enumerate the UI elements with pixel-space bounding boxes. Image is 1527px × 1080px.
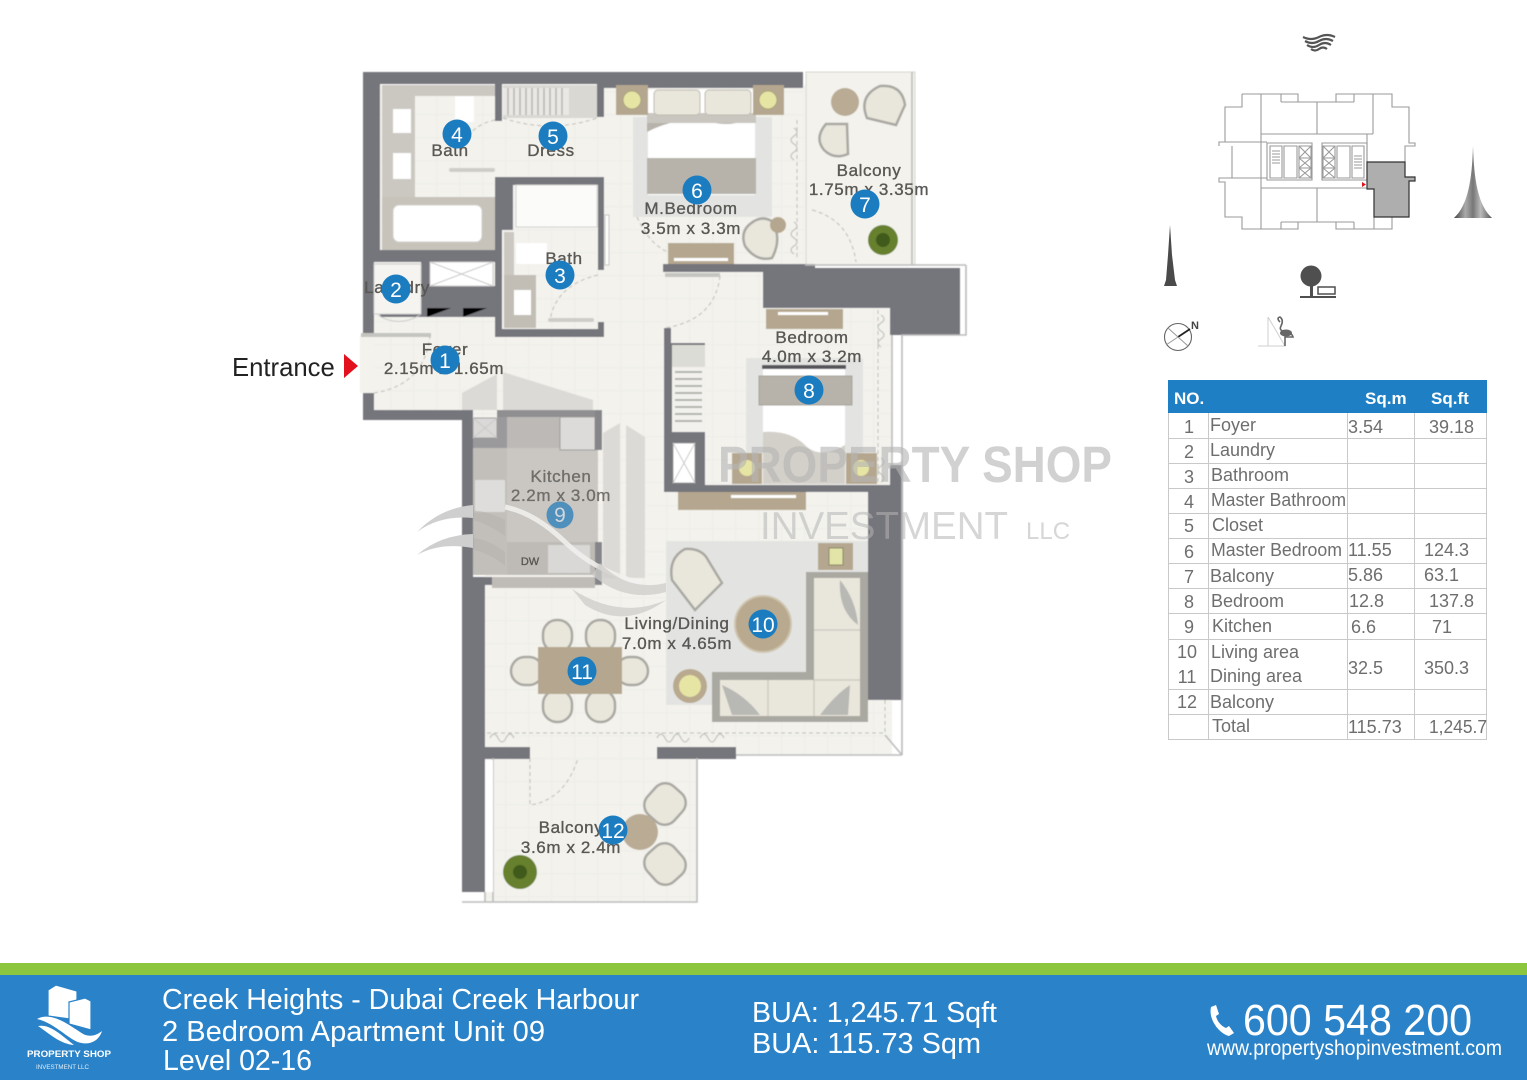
square metre values: 115.73 [1348,717,1402,737]
marker 7 [850,190,880,218]
marker 6: 6 [691,180,703,203]
marker 11 [568,656,596,686]
label: laundry: Laundry [364,278,430,297]
square foot values: 39.18 [1429,417,1474,437]
square foot values: 1,245.7 [1429,717,1487,737]
row numbers: 10 [1177,642,1197,662]
square metre values [1348,417,1402,737]
panel: dining set [511,620,648,722]
row numbers: 1 [1184,417,1194,437]
label: foyer size: 2.15m x 1.65m [384,359,504,378]
row names: Kitchen [1212,616,1272,636]
green stripe [0,963,1527,975]
square foot values: 137.8 [1429,591,1474,611]
table header: Sq.ft [1431,389,1469,408]
row numbers: 6 [1184,542,1194,562]
area table [1168,380,1487,740]
label: kitchen: Kitchen [531,467,591,486]
table header: Sq.m [1365,389,1407,408]
row numbers: 2 [1184,442,1194,462]
marker 10 [748,610,778,638]
row names: Total [1212,716,1250,736]
label: kitchen size: 2.2m x 3.0m [511,486,611,505]
row numbers: 9 [1184,617,1194,637]
row numbers: 5 [1184,516,1194,536]
BUA square metres: BUA: 115.73 Sqm [752,1028,981,1060]
marker 12 [598,816,628,844]
marker 2 [382,274,410,304]
phone number: 600 548 200 [1243,996,1472,1045]
logo waves [37,1017,102,1045]
marker 4: 4 [451,124,463,147]
watermark: Property Shop: INVESTMENT [760,505,1008,548]
marker 12: 12 [601,820,625,843]
label: dishwasher: DW [521,556,540,568]
row names: Bedroom [1211,591,1284,611]
panel: master bedroom furniture [616,85,797,264]
marker 8: 8 [803,380,815,403]
icon: water waves [1303,35,1335,50]
small balcony wall strips [485,760,493,892]
icon: flamingo and sailboat [1258,317,1293,346]
row names [1210,415,1346,736]
project title: Creek Heights - Dubai Creek Harbour [162,984,639,1016]
key plan [1164,35,1492,350]
label: bath 3: Bath [545,249,583,268]
logo subtitle: INVESTMENT LLC [36,1064,89,1071]
panel: kitchen [473,410,602,588]
row names: Closet [1212,515,1263,535]
panel: balcony 12 furniture [503,758,691,890]
marker 1: 1 [439,350,451,373]
watermark text: PROPERTY SHOP [718,436,1112,493]
row numbers: 11 [1178,667,1196,687]
square metre values: 32.5 [1348,658,1383,678]
panel: balcony 7 floor [806,72,915,265]
floor surface [363,85,892,902]
label: living dining size: 7.0m x 4.65m [622,634,732,653]
unit title: 2 Bedroom Apartment Unit 09 [162,1016,545,1048]
icon: Burj Khalifa [1164,225,1177,286]
square foot values: 63.1 [1424,565,1459,585]
table header: NO. [1174,389,1204,408]
row names: Laundry [1210,440,1275,460]
row numbers: 8 [1184,592,1194,612]
marker 5: 5 [547,126,559,149]
floor plan [360,72,966,902]
row names: Balcony [1210,692,1274,712]
panel: living-balcony divide [487,700,885,742]
highlighted unit 09 [1367,162,1415,217]
logo buildings [48,985,91,1030]
marker 6 [682,176,712,204]
logo name: PROPERTY SHOP [27,1049,112,1060]
marker 4 [442,120,472,148]
marker 3 [546,260,574,290]
blue footer background [0,975,1527,1080]
icon: compass [1164,320,1199,350]
marker 9: 9 [554,504,566,527]
marker 9 [546,502,574,528]
row names: Bathroom [1211,465,1289,485]
square metre values: 3.54 [1348,417,1383,437]
entrance label [232,354,358,382]
level: Level 02-16 [163,1045,312,1077]
marker 1 [430,346,460,374]
numbered room markers [382,120,880,844]
website: www.propertyshopinvestment.com [1206,1037,1502,1060]
row names: Living area [1211,642,1300,662]
table header [1168,380,1487,413]
label: bedroom size: 4.0m x 3.2m [762,347,862,366]
panel: master bath fixtures [382,85,495,250]
icon: unit entrance [1362,182,1366,187]
panel: living room furniture [666,541,868,722]
square foot values: 124.3 [1424,540,1469,560]
label: balcony 7: Balcony [837,161,901,180]
label: balcony 12: Balcony [539,818,603,837]
BUA square feet: BUA: 1,245.71 Sqft [752,997,997,1029]
label: master bedroom: M.Bedroom [644,199,738,218]
row numbers: 7 [1184,567,1194,587]
row numbers: 3 [1184,467,1194,487]
marker 11: 11 [571,661,593,684]
marker 8 [794,376,824,404]
square foot values [1424,417,1487,737]
entrance text: Entrance [232,354,335,382]
watermark waves [417,505,666,616]
marker 5 [538,122,568,150]
row names: Master Bathroom [1211,490,1346,510]
square metre values: 5.86 [1348,565,1383,585]
label: living dining: Living/Dining [624,614,730,633]
label: balcony 12 size: 3.6m x 2.4m [521,838,621,857]
row numbers: 12 [1177,692,1197,712]
row names: Balcony [1210,566,1274,586]
icon: phone [1211,1005,1234,1036]
row names: Master Bedroom [1211,540,1342,560]
panel: bath 3 fixtures [504,185,609,328]
outer thin outlines [462,72,966,902]
building outline [1219,94,1415,229]
marker 10: 10 [751,614,775,637]
icon: entrance door gap [360,333,431,393]
room labels [364,141,929,857]
label: balcony 7 size: 1.75m x 3.35m [809,180,929,199]
footer logo [27,985,112,1071]
label: bath 4: Bath [431,141,469,160]
square foot values: 71 [1432,617,1452,637]
icon: tree and bench [1300,266,1336,298]
panel: bedroom furniture [665,275,884,510]
marker 7: 7 [859,194,871,217]
icon: Burj Al Arab tower [1454,146,1492,218]
table grid [1168,413,1487,740]
label: foyer: Foyer [422,340,468,359]
icon: entrance arrow [344,354,358,378]
row names: Dining area [1210,666,1303,686]
square metre values: 6.6 [1351,617,1376,637]
row numbers [1177,417,1197,712]
panel: laundry [374,262,493,322]
label: bedroom: Bedroom [775,328,849,347]
row numbers: 4 [1184,492,1194,512]
compass north: N [1191,320,1199,332]
panel: closet [503,85,597,126]
watermark: Property Shop [417,436,1112,616]
square metre values: 12.8 [1349,591,1384,611]
label: dress: Dress [527,141,575,160]
label: master bedroom size: 3.5m x 3.3m [641,219,741,238]
marker 3: 3 [554,265,566,288]
structural walls [363,72,960,892]
panel: balcony 7 furniture [812,86,905,262]
watermark: Property Shop: LLC [1026,518,1070,545]
watermark logo buildings [462,372,645,578]
footer band [0,963,1527,1080]
marker 2: 2 [390,279,402,302]
square foot values: 350.3 [1424,658,1469,678]
row names: Foyer [1210,415,1256,435]
square metre values: 11.55 [1348,540,1392,560]
